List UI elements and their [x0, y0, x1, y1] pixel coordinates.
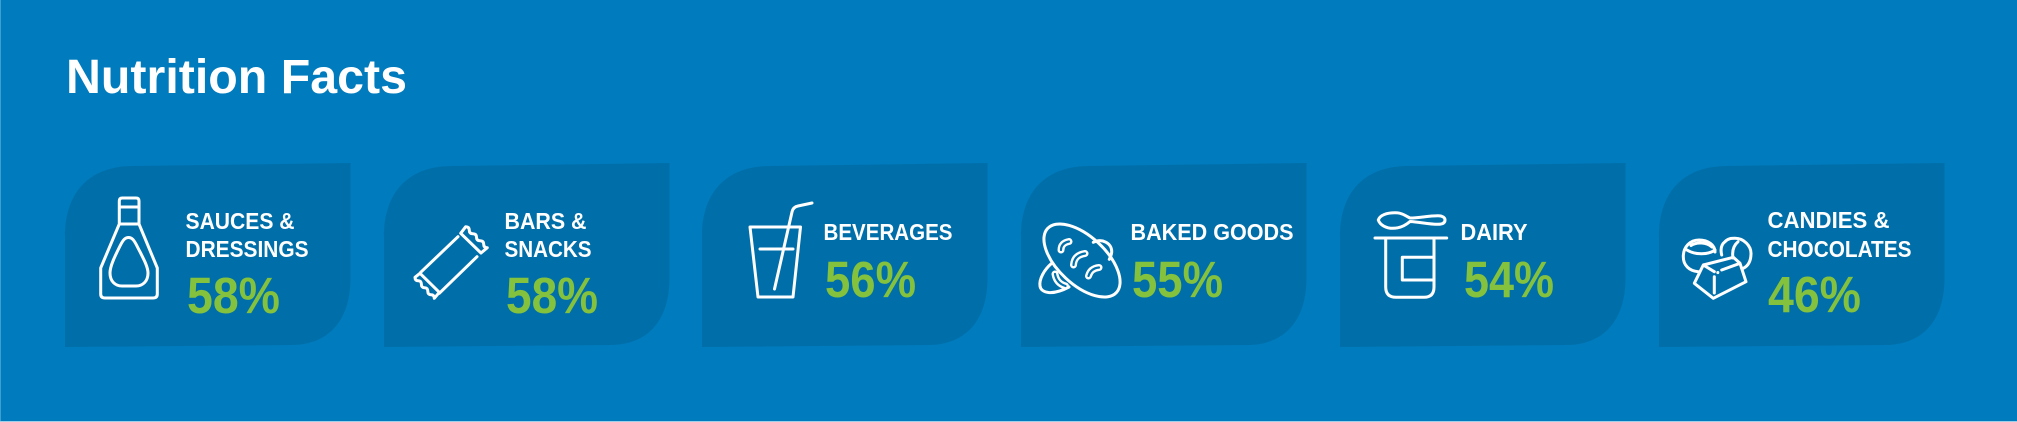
icon: bread loaves [1031, 211, 1133, 310]
label: SAUCES & [186, 208, 294, 234]
label: BEVERAGES [824, 219, 952, 245]
title: Nutrition Facts [66, 51, 407, 104]
icon: snack bar [415, 227, 487, 298]
panel: bars and snacks [384, 163, 670, 347]
label: BAKED GOODS [1130, 219, 1294, 245]
panel: dairy [1340, 163, 1626, 347]
value: 54% [1464, 251, 1554, 308]
panel: sauces and dressings [65, 163, 350, 347]
value: 46% [1768, 266, 1861, 323]
icon: glass with straw [750, 203, 812, 297]
label [504, 208, 592, 262]
value: 56% [825, 251, 916, 308]
icon: bottle [101, 198, 157, 298]
panel: beverages [702, 163, 988, 347]
label: CHOCOLATES [1768, 236, 1912, 262]
label [186, 208, 308, 262]
label: CANDIES & [1768, 207, 1890, 233]
icon: yogurt and spoon [1375, 213, 1447, 297]
value: 58% [506, 267, 598, 324]
panel: candies and chocolates [1659, 163, 1944, 347]
value: 55% [1132, 251, 1223, 308]
label: BARS & [504, 208, 586, 234]
label [1768, 207, 1912, 262]
label: DAIRY [1460, 219, 1528, 245]
value: 58% [187, 267, 280, 324]
label: SNACKS [504, 236, 592, 262]
icon: chocolates [1683, 238, 1751, 298]
panel: baked goods [1021, 163, 1306, 347]
label: DRESSINGS [186, 236, 308, 262]
